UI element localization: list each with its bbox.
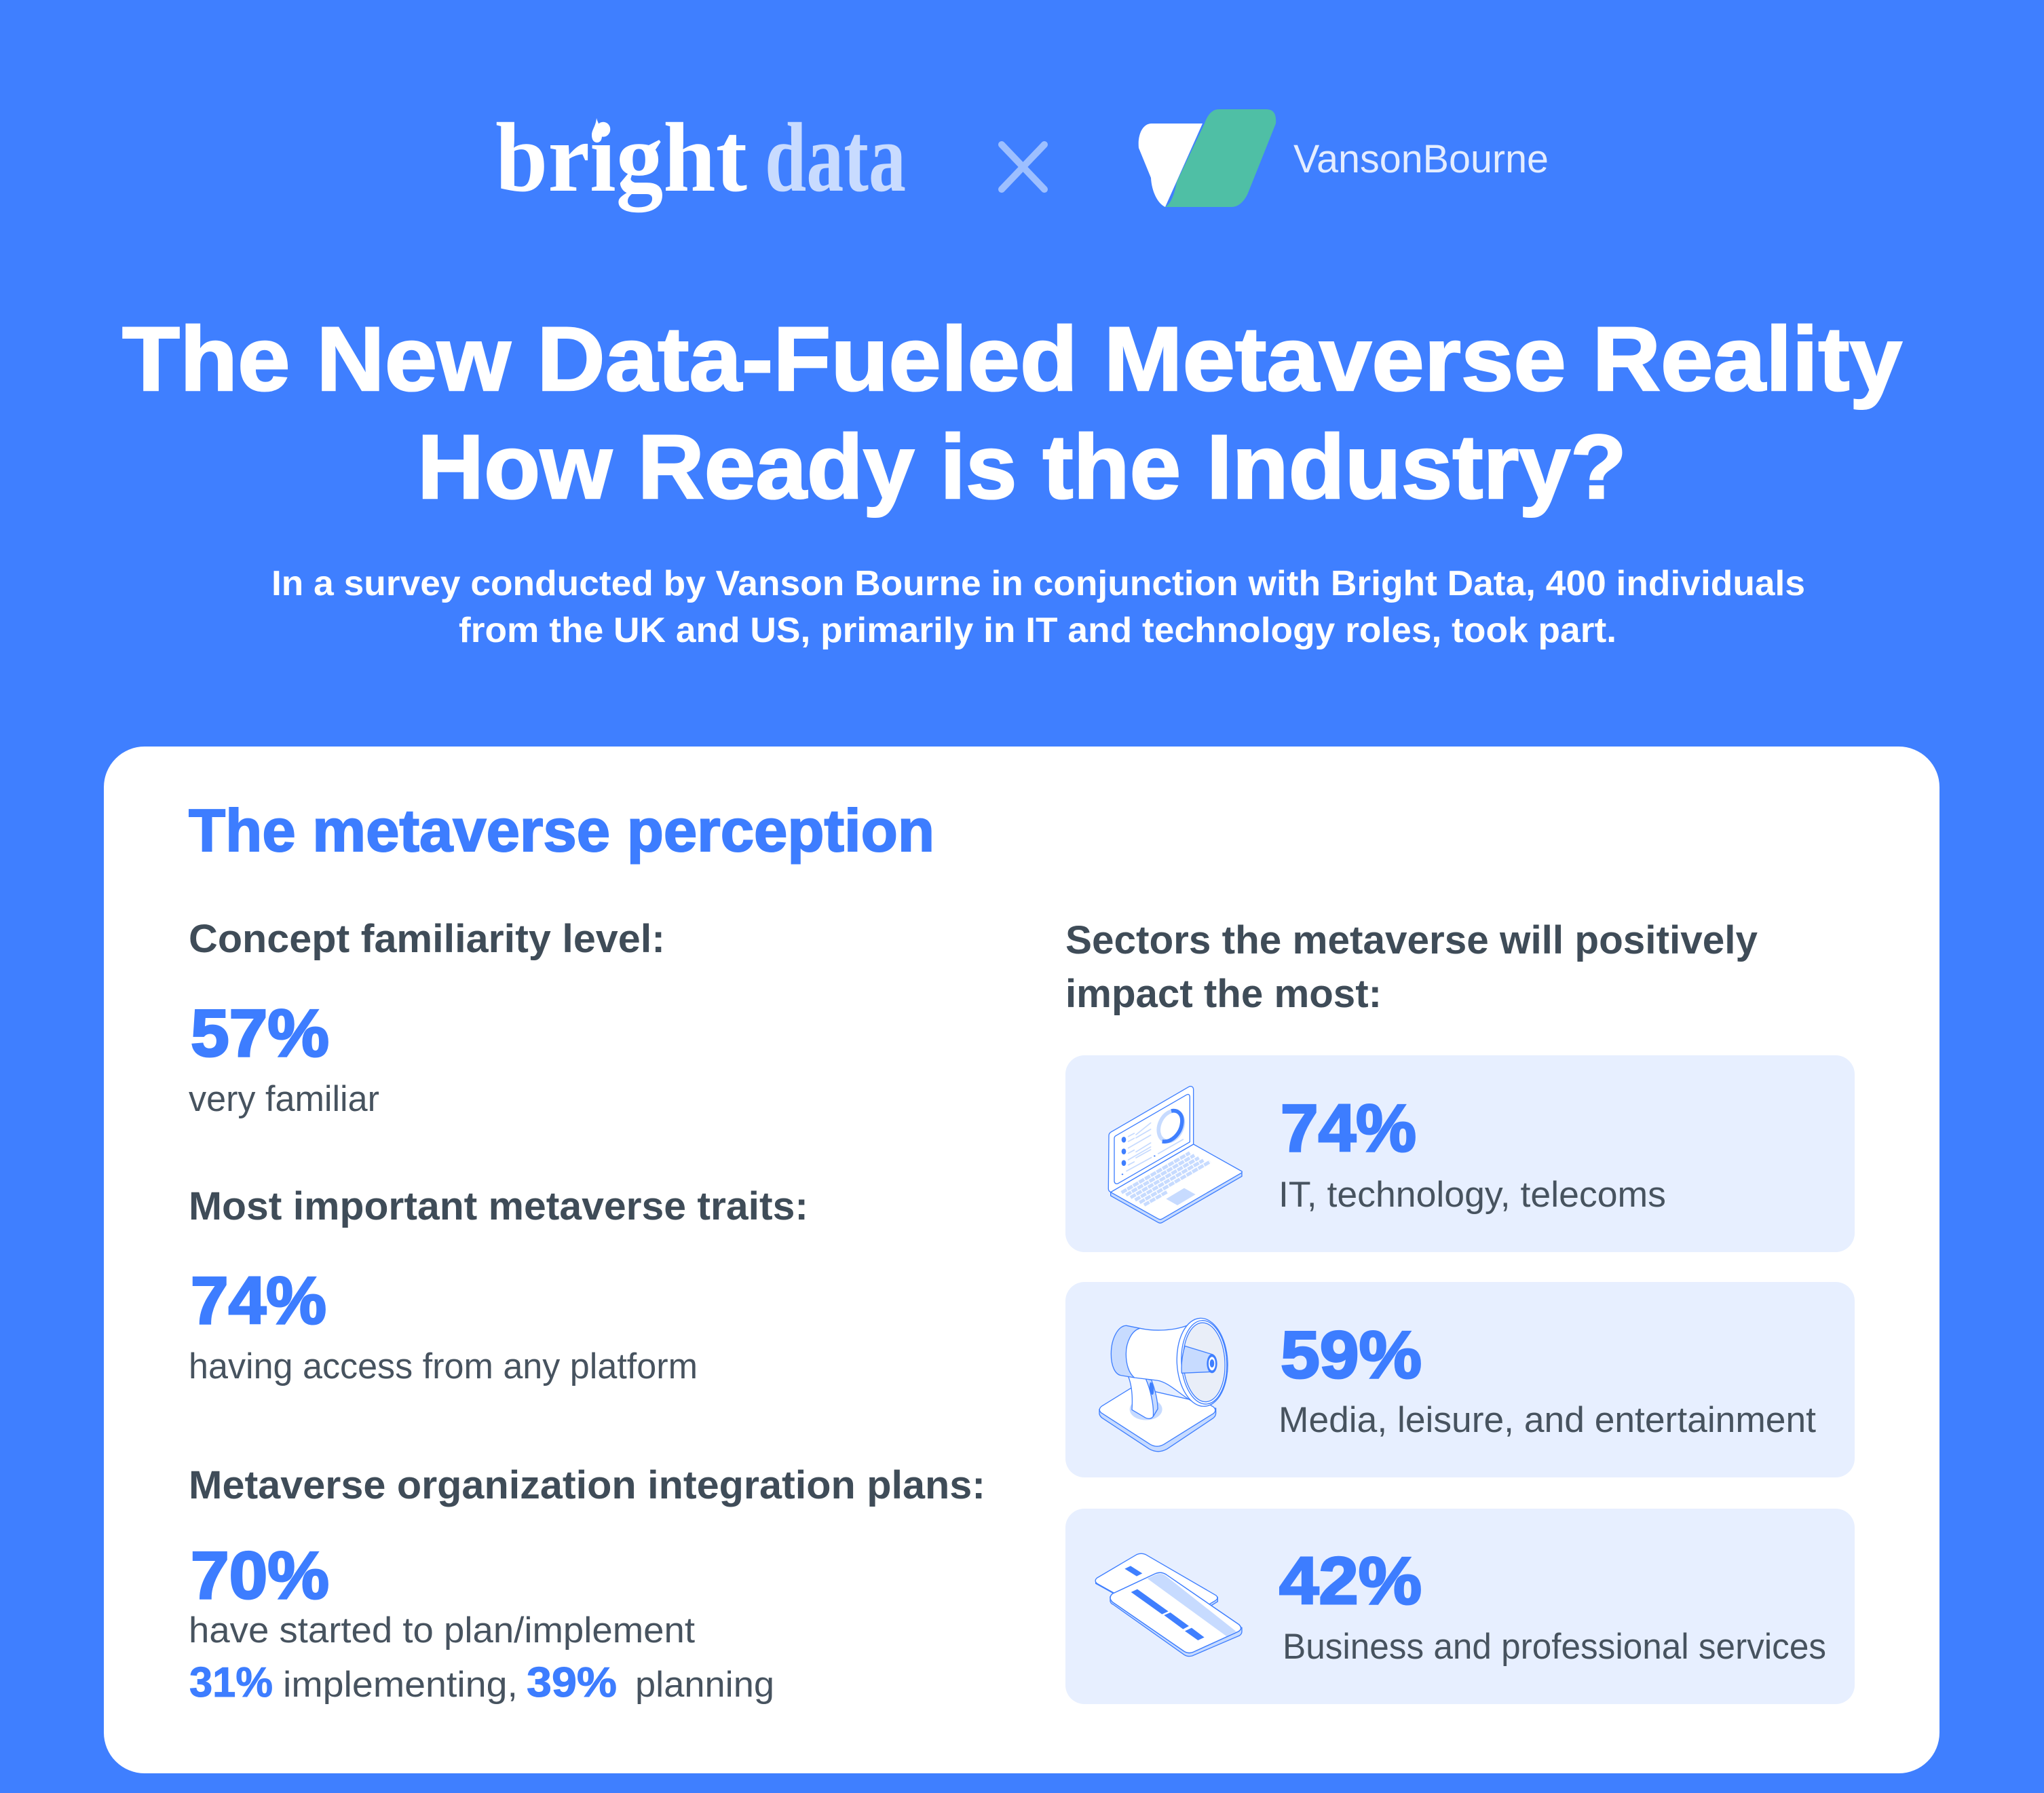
stat: metaverse traits: 74% <box>191 1263 326 1338</box>
stat: integration plans: 39% <box>527 1659 617 1706</box>
stat: metaverse traits <box>189 1184 808 1386</box>
icon: megaphone <box>1099 1317 1230 1452</box>
stat: metaverse traits: having access from any platform <box>189 1346 698 1386</box>
icon: credit cards <box>1095 1553 1242 1657</box>
icon: laptop <box>1108 1087 1242 1223</box>
intro text: from the UK and US, primarily in IT and technology roles, took part. <box>459 611 1616 650</box>
sector card: IT: IT, technology, telecoms <box>1279 1175 1666 1215</box>
title: The New Data-Fueled Metaverse Reality <box>122 309 1902 410</box>
stat: metaverse traits: Most important metaverse traits: <box>189 1184 808 1228</box>
stat: integration plans: 31% <box>189 1659 273 1706</box>
sector card: IT: 74% <box>1281 1091 1416 1165</box>
logo: VansonBourne: VansonBourne <box>1293 137 1549 181</box>
stat: concept familiarity <box>189 917 665 1119</box>
title <box>122 309 1902 518</box>
sector card: media <box>1065 1282 1855 1477</box>
title: How Ready is the Industry? <box>417 417 1627 518</box>
sector card: business <box>1065 1509 1855 1704</box>
stat: integration plans: have started to plan/implement <box>189 1610 695 1650</box>
panel: the metaverse perception <box>104 747 1939 1773</box>
sector card: media: 59% <box>1281 1317 1422 1392</box>
sector card: business: 42% <box>1279 1543 1422 1618</box>
logos header <box>495 102 1549 212</box>
sector card: media: Media, leisure, and entertainment <box>1279 1400 1816 1440</box>
logo: bright data: bright <box>495 102 747 212</box>
stat: integration plans <box>189 1463 985 1706</box>
logo: bright data <box>495 102 906 212</box>
stat: integration plans: Metaverse organization integration plans: <box>189 1463 985 1507</box>
intro text: In a survey conducted by Vanson Bourne in conjunction with Bright Data, 400 individuals <box>271 564 1805 603</box>
sectors heading: Sectors the metaverse will positively <box>1065 918 1758 962</box>
sector card: IT <box>1065 1055 1855 1252</box>
logo: VansonBourne <box>1139 109 1549 207</box>
stat: integration plans: planning <box>635 1665 774 1705</box>
sector card: business: Business and professional services <box>1283 1627 1826 1667</box>
stat: concept familiarity: 57% <box>191 996 329 1070</box>
panel heading: The metaverse perception <box>189 797 934 864</box>
sectors heading <box>1065 918 1758 1016</box>
stat: integration plans: implementing, <box>283 1665 518 1705</box>
stat: concept familiarity: very familiar <box>189 1079 379 1119</box>
stat: concept familiarity: Concept familiarity level: <box>189 917 665 961</box>
logo: bright data: data <box>765 102 906 212</box>
sectors heading: impact the most: <box>1065 972 1382 1016</box>
stat: integration plans: 70% <box>191 1538 329 1612</box>
icon: times sign <box>1002 145 1044 189</box>
intro text <box>271 564 1805 650</box>
